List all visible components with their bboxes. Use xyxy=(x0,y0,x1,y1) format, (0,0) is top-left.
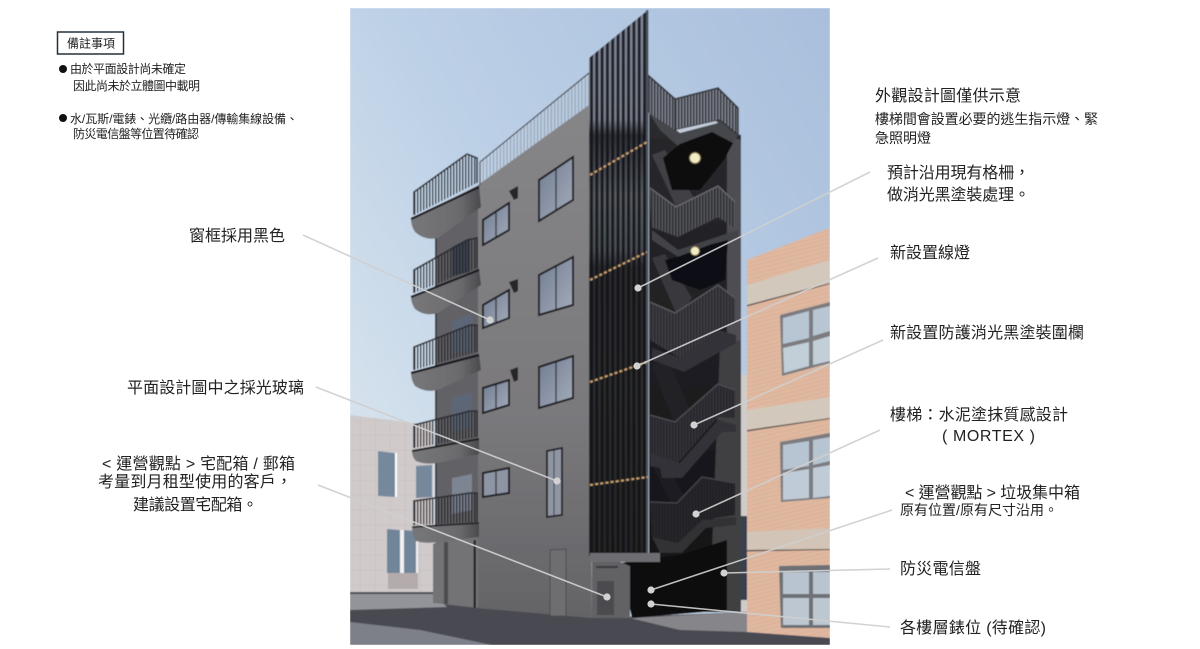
label: new guard railing: 新設置防護消光黑塗裝圍欄 xyxy=(890,324,1084,342)
neighbouring brick building right xyxy=(741,228,830,638)
label: existing grille: 做消光黑塗裝處理。 xyxy=(887,186,1030,204)
wall sconces xyxy=(509,186,518,382)
main facade wall xyxy=(478,105,592,618)
landing railing 3 xyxy=(650,285,735,358)
label: parcel box xyxy=(98,455,295,514)
note 1: 由於平面設計尚未確定 xyxy=(70,61,186,76)
label: garbage bin: < 運營觀點 > 垃圾集中箱 xyxy=(905,484,1080,502)
label: telecom panel: 防災電信盤 xyxy=(900,560,981,578)
notes heading box xyxy=(58,32,124,54)
ground xyxy=(350,592,830,645)
windows row 2 xyxy=(483,257,573,328)
notes heading box: 備註事項 xyxy=(67,36,115,50)
balcony 2 xyxy=(411,238,481,314)
note 2 xyxy=(59,111,298,141)
label: skylight glass: 平面設計圖中之採光玻璃 xyxy=(127,379,304,397)
skylight glass tall window xyxy=(547,448,562,517)
ceiling light upper xyxy=(690,152,700,164)
louver screen xyxy=(589,10,648,556)
label: parcel box: 建議設置宅配箱。 xyxy=(133,496,258,514)
label: meters: 各樓層錶位 (待確認) xyxy=(900,619,1046,637)
roof railing xyxy=(480,73,589,185)
landing railing 2 xyxy=(650,186,735,237)
balcony 4 xyxy=(412,411,479,464)
flight railing 5 xyxy=(650,477,735,543)
label: existing grille: 預計沿用現有格柵， xyxy=(887,164,1030,182)
label: stairs finish: 樓梯：水泥塗抹質感設計 xyxy=(890,405,1068,424)
label: parcel box: < 運營觀點 > 宅配箱 / 郵箱 xyxy=(102,455,295,473)
stair side wall xyxy=(726,138,741,342)
ground level opening xyxy=(620,540,727,618)
stair tower xyxy=(620,76,741,618)
label: stairs finish xyxy=(890,405,1068,445)
balcony 5 xyxy=(412,493,479,543)
service door xyxy=(550,549,566,616)
downpipe xyxy=(474,540,476,608)
balcony 1 xyxy=(411,154,481,239)
note 1: 因此尚未於立體圖中載明 xyxy=(73,78,200,93)
note 1 xyxy=(59,61,200,93)
windows row 3 xyxy=(483,356,573,413)
label: stairs finish: ( MORTEX ) xyxy=(942,428,1035,445)
sky xyxy=(350,8,830,645)
roof railing and slab xyxy=(649,113,739,146)
note 2: 防災電信盤等位置待確認 xyxy=(73,126,199,141)
notes panel xyxy=(58,32,298,141)
leader dots xyxy=(486,284,728,608)
base panel meter cabinet xyxy=(592,562,630,618)
label: garbage bin xyxy=(900,484,1080,518)
label: new line lights: 新設置線燈 xyxy=(890,244,970,262)
balcony recess wall xyxy=(433,190,478,608)
label: garbage bin: 原有位置/原有尺寸沿用。 xyxy=(900,502,1058,518)
balcony 3 xyxy=(411,325,481,391)
label: existing grille xyxy=(887,164,1030,204)
note 2: 水/瓦斯/電錶、光纜/路由器/傳輸集線設備、 xyxy=(70,111,298,126)
label: exterior design note: 外觀設計圖僅供示意 xyxy=(875,86,1021,105)
facade windows xyxy=(474,157,573,616)
windows row 4 xyxy=(483,468,509,497)
windows row 1 xyxy=(483,157,573,245)
label: window frames: 窗框採用黑色 xyxy=(189,227,285,245)
ceiling light lower xyxy=(690,246,700,256)
flight railing 4 xyxy=(650,384,735,463)
louver foot xyxy=(590,553,660,562)
leader lines xyxy=(303,172,892,627)
label: exterior design note: 樓梯間會設置必要的逃生指示燈、緊 xyxy=(875,111,1098,127)
label: exterior design note xyxy=(875,86,1098,146)
building photo rendering xyxy=(350,8,830,645)
label: exterior design note: 急照明燈 xyxy=(875,130,931,146)
label: parcel box: 考量到月租型使用的客戶， xyxy=(98,473,292,491)
neighbouring building left xyxy=(350,415,433,594)
line lights xyxy=(590,142,648,485)
diagonal beams xyxy=(652,150,694,206)
